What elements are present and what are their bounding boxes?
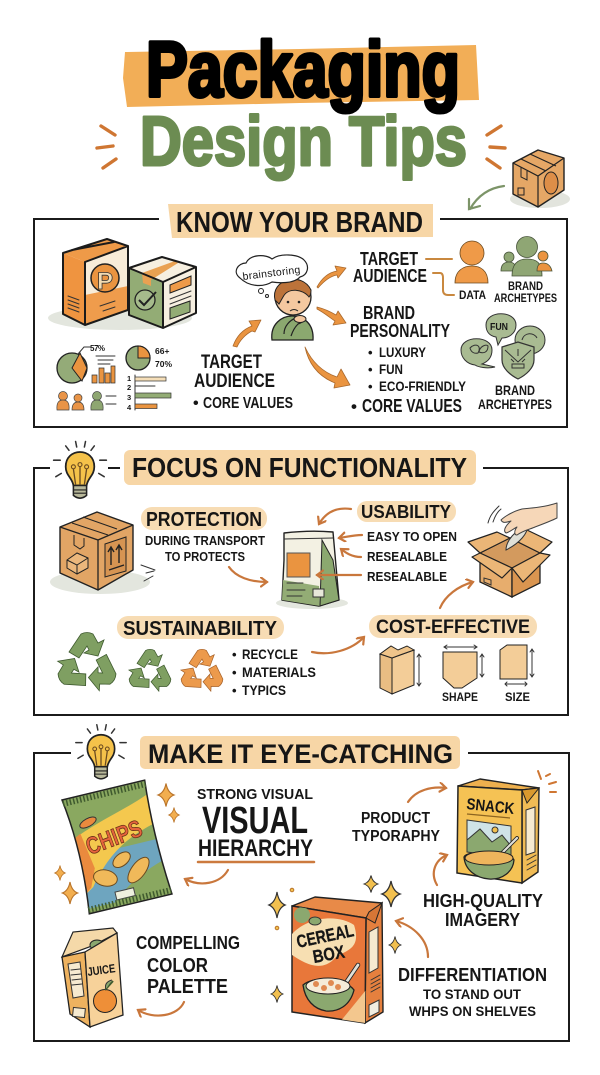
arrow: to core values: [305, 347, 350, 388]
icon: person brainstorming: [272, 279, 313, 340]
text: sustainability list: •: [232, 683, 237, 698]
thought bubble: brainstoring: [242, 264, 301, 283]
icon: audience person: [455, 241, 488, 283]
sparkles around chips: [55, 784, 179, 904]
icon: parcel top right: [510, 150, 570, 208]
arrow: hierarchy to chips: [185, 870, 228, 883]
text: differentiation: TO STAND OUT: [423, 986, 521, 1002]
title highlight: [123, 45, 479, 107]
decorative rays left: [97, 126, 116, 168]
text: visual hierarchy: [197, 786, 314, 862]
text: product typography: PRODUCT: [361, 810, 430, 827]
icon: light bulb: [54, 442, 106, 498]
text: usability list: RESEALABLE: [367, 549, 447, 564]
text: target audience right: [353, 249, 427, 286]
text: brand personality list: FUN: [379, 361, 403, 377]
decorative rays right: [487, 126, 505, 168]
title: [123, 25, 479, 180]
text: sustainability list: •: [232, 647, 237, 662]
text: visual hierarchy: STRONG VISUAL: [197, 786, 313, 803]
text: compelling color palette: PALETTE: [147, 976, 228, 998]
text: compelling color palette: [136, 933, 240, 998]
panel frame: [34, 468, 568, 715]
icon: archetype bubbles and shield: FUN: [490, 322, 508, 333]
text: target audience left: TARGET: [201, 352, 262, 373]
text: brand personality list: PERSONALITY: [350, 321, 450, 341]
text: during transport: DURING TRANSPORT: [145, 533, 265, 548]
heading: focus on functionality: FOCUS ON FUNCTIONALITY: [132, 452, 467, 483]
label: usability: USABILITY: [361, 502, 451, 522]
text: brand personality list: CORE VALUES: [362, 396, 462, 416]
heading: make it eye-catching: MAKE IT EYE-CATCHING: [148, 739, 453, 769]
text: brand personality list: BRAND: [363, 303, 415, 323]
panel: make it eye-catching: [34, 725, 569, 1041]
chart: small statistics: 57%: [90, 344, 105, 353]
text: target audience right: TARGET: [360, 249, 418, 269]
arrow: usability to pouch: [319, 509, 351, 524]
label: cost-effective: COST-EFFECTIVE: [376, 617, 530, 638]
arrows: usability list to pouch: [317, 535, 362, 575]
arrow: typography to snack: [408, 788, 446, 802]
thought bubble: [236, 255, 307, 298]
text: brand personality list: •: [368, 379, 373, 394]
arrow: imagery to snack: [434, 855, 447, 885]
text: usability list: RESEALABLE: [367, 569, 447, 584]
arrow: sustainability to cost: [312, 637, 364, 653]
text: sustainability list: [232, 646, 316, 698]
icon: recycle medium: [124, 649, 176, 695]
text: target audience left: CORE VALUES: [203, 395, 293, 412]
arrow: differentiation to cereal: [396, 921, 428, 957]
chart: small statistics: 66+: [155, 346, 169, 356]
title line 2: Design Tips: [140, 102, 467, 180]
text: during transport: TO PROTECTS: [165, 549, 245, 564]
chart: small statistics: 4: [127, 403, 132, 412]
icon: cereal box: BOX: [311, 942, 346, 967]
label: brand archetypes bottom: [478, 382, 552, 412]
panel: focus on functionality: [34, 442, 568, 715]
icon: light bulb: [76, 725, 126, 779]
icon: archetype bubbles and shield: [461, 314, 545, 379]
icon: recycle large: [51, 632, 123, 695]
icon: snack box: [457, 771, 556, 883]
icon: chips bag: [62, 780, 172, 914]
icon: orange and green product boxes: [48, 239, 196, 330]
chart: small statistics: [57, 344, 172, 412]
text: sustainability list: TYPICS: [242, 682, 286, 698]
chart: small statistics: 3: [127, 393, 131, 402]
connector lines to data: [426, 259, 454, 295]
text: brand personality list: •: [368, 345, 373, 360]
text: target audience left: [193, 352, 293, 412]
text: during transport: [145, 533, 265, 564]
label: brand archetypes top: ARCHETYPES: [494, 291, 557, 305]
icon: chips bag: CHIPS: [82, 815, 146, 861]
text: visual hierarchy: HIERARCHY: [198, 835, 313, 862]
title line 1: Packaging: [146, 25, 460, 113]
label: brand archetypes bottom: BRAND: [495, 382, 535, 398]
label: protection: PROTECTION: [146, 509, 262, 531]
text: brand personality list: •: [368, 362, 373, 377]
icon: pouch: [276, 531, 348, 609]
arrow: palette to juice: [138, 1002, 184, 1016]
icon: shipping box: [50, 512, 155, 594]
panel: know your brand: [34, 204, 567, 427]
label: brand archetypes top: BRAND: [508, 279, 543, 293]
text: high-quality imagery: HIGH-QUALITY: [423, 891, 543, 911]
text: compelling color palette: COLOR: [147, 955, 208, 977]
text: brand personality list: •: [351, 397, 357, 416]
arrow: cost effective to box: [440, 582, 473, 608]
text: usability list: [367, 529, 457, 584]
text: sustainability list: RECYCLE: [242, 646, 298, 662]
text: differentiation: DIFFERENTIATION: [398, 965, 547, 985]
text: differentiation: [398, 965, 547, 1019]
icon: open box and hand: [468, 503, 557, 597]
text: high-quality imagery: [423, 891, 543, 930]
text: target audience left: •: [193, 395, 199, 412]
heading: know your brand: KNOW YOUR BRAND: [176, 207, 423, 239]
arrow: protection to pouch: [229, 567, 267, 582]
icon: juice carton: [62, 928, 123, 1027]
icon: snack box: SNACK: [466, 796, 515, 818]
panel frame: [34, 753, 569, 1041]
arrow: to target audience: [317, 266, 346, 288]
arrow: up to person: [233, 320, 261, 347]
text: visual hierarchy: VISUAL: [202, 800, 308, 842]
text: product typography: TYPORAPHY: [352, 828, 440, 845]
text: sustainability list: •: [232, 665, 237, 680]
panel frame: [34, 219, 567, 427]
text: target audience left: AUDIENCE: [194, 371, 275, 392]
label: shape: SHAPE: [442, 690, 478, 704]
text: sustainability list: MATERIALS: [242, 664, 316, 680]
icon: orange and green product boxes: P: [97, 268, 113, 295]
text: brand personality list: ECO-FRIENDLY: [379, 378, 467, 394]
chart: small statistics: 70%: [155, 359, 172, 369]
arrow: to brand personality: [317, 307, 346, 325]
text: brand personality list: LUXURY: [379, 344, 427, 360]
text: high-quality imagery: IMAGERY: [445, 910, 520, 930]
text: product typography: [352, 810, 440, 845]
text: brand personality list: [350, 303, 467, 416]
text: compelling color palette: COMPELLING: [136, 933, 240, 953]
icon: audience group: [501, 236, 552, 276]
icon: cereal box: CEREAL: [295, 920, 356, 952]
text: target audience right: AUDIENCE: [353, 266, 427, 286]
arrow to parcel: [469, 186, 504, 209]
sparkles around cereal box: [269, 876, 401, 1002]
icon: juice carton: JUICE: [86, 961, 116, 979]
label: data: DATA: [459, 288, 486, 302]
label: sustainability: SUSTAINABILITY: [123, 618, 278, 640]
chart: small statistics: 1: [127, 374, 131, 383]
text: differentiation: WHPS ON SHELVES: [409, 1003, 536, 1019]
chart: small statistics: 2: [127, 383, 131, 392]
icon: cereal box: [292, 897, 383, 1023]
label: brand archetypes bottom: ARCHETYPES: [478, 396, 552, 412]
icon: packaging shapes: [380, 645, 534, 694]
icon: recycle orange: [176, 649, 228, 695]
label: brand archetypes top: [494, 279, 557, 305]
text: usability list: EASY TO OPEN: [367, 529, 457, 544]
label: size: SIZE: [505, 690, 530, 704]
